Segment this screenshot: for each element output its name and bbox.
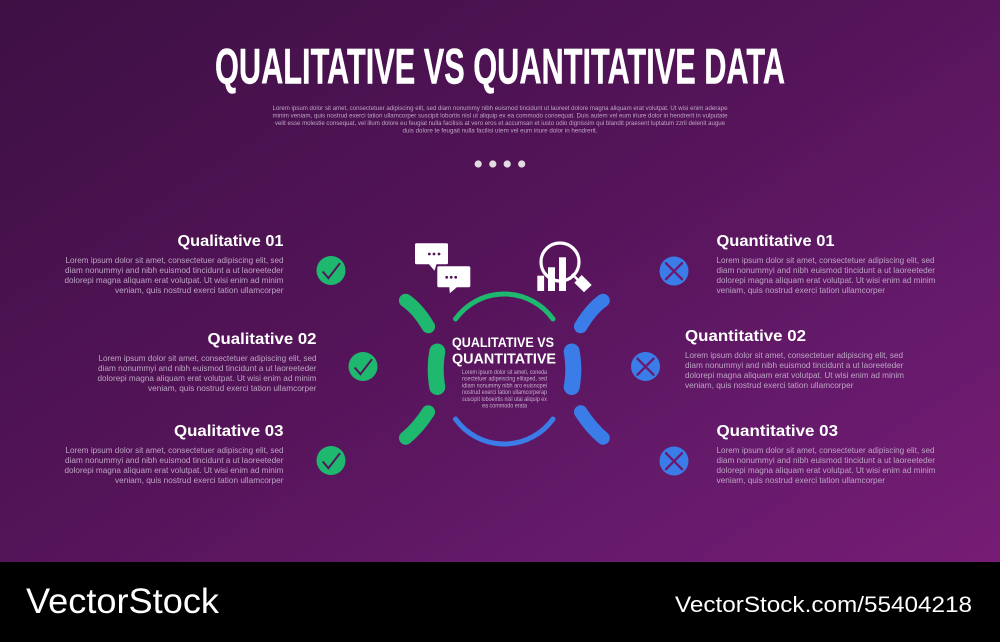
body text: diam nonummyi and nibh euismod tincidunt a ut laoreeteder (98, 363, 317, 373)
heading: Quantitative 02 (685, 328, 806, 345)
body text: diam nonummyi and nibh euismod tincidunt a ut laoreeteder (65, 265, 284, 275)
center text: Lorem ipsum dolor sit ameti, coneda (462, 370, 548, 376)
body text: veniam, quis nostrud exerci tation ullamcorper (115, 285, 284, 295)
heading: Qualitative 03 (174, 423, 284, 440)
body text: Lorem ipsum dolor sit amet, consectetuer adipiscing elit, sed (98, 353, 317, 363)
panel: Qualitative 03 (64, 423, 284, 485)
heading: Qualitative 02 (208, 331, 317, 348)
pagination dots (475, 160, 525, 168)
heading: Quantitative 03 (716, 423, 838, 440)
footer logo: VectorStock (26, 582, 220, 621)
icon: magnifier bar chart (537, 243, 592, 292)
center text (462, 370, 548, 410)
body text: dolorepi magna aliquam erat volutpat. Ut wisi enim ad minim (685, 370, 904, 380)
center heading (452, 335, 556, 368)
intro text (272, 105, 728, 134)
body text: dolorepi magna aliquam erat volutpat. Ut wisi enim ad minim (64, 275, 284, 285)
body text: diam nonummyi and nibh euismod tincidunt a ut laoreeteder (65, 455, 284, 465)
body text: dolorepi magna aliquam erat volutpat. Ut wisi enim ad minim (98, 373, 316, 383)
icon: check 01 (316, 256, 346, 285)
body text: dolorepi magna aliquam erat volutpat. Ut wisi enim ad minim (716, 465, 936, 475)
intro text: velit esse molestie consequat, vel illum dolore eu feugiat nulla facilisis at vero eros et accumsan et iusto odio dignissim qui blandit praesent luptatum zzril delenit augue (275, 120, 726, 127)
body text: diam nonummyi and nibh euismod tincidunt a ut laoreeteder (716, 455, 935, 465)
icon: chat bubbles (415, 243, 470, 293)
body text (98, 353, 317, 393)
body text: veniam, quis nostrud exerci tation ullamcorper (115, 475, 284, 485)
body text: Lorem ipsum dolor sit amet, consectetuer adipiscing elit, sed (66, 445, 284, 455)
center heading: QUALITATIVE VS (452, 335, 554, 350)
body text: veniam, quis nostrud exerci tation ullamcorper (685, 380, 854, 390)
icon: cross 03 (660, 446, 688, 476)
panel: Qualitative 01 (64, 233, 284, 295)
center text: nsectetuer adipeiscing elitaped, sed (462, 377, 547, 383)
body text (716, 255, 936, 295)
center text: idiam nonummy nibh aro euisnopei (462, 383, 547, 389)
center text: suscipit loboeirtis nisl utai aliquip ex (462, 397, 547, 403)
body text (64, 255, 284, 295)
body text (716, 445, 936, 485)
intro text: Lorem ipsum dolor sit amet, consectetuer adipiscing elit, sed diam nonummy nibh euismod tincidunt ut laoreet dolore magna aliquam erat volutpat. Ut wisi enim aderape (272, 105, 728, 112)
center text: nostrud exerci tation ullamcorperap (462, 390, 548, 396)
footer bar (0, 562, 1000, 642)
body text: dolorepi magna aliquam erat volutpat. Ut wisi enim ad minim (64, 465, 284, 475)
body text (64, 445, 284, 485)
icon: check 02 (348, 352, 378, 381)
body text: Lorem ipsum dolor sit amet, consectetuer adipiscing elit, sed (716, 255, 935, 265)
central diagram (406, 294, 603, 444)
body text: dolorepi magna aliquam erat volutpat. Ut wisi enim ad minim (716, 275, 936, 285)
heading: Qualitative 01 (178, 233, 284, 250)
body text: diam nonummyi and nibh euismod tincidunt a ut laoreeteder (716, 265, 935, 275)
body text: veniam, quis nostrud exerci tation ullamcorper (716, 285, 885, 295)
center heading: QUANTITATIVE (452, 352, 556, 368)
body text: Lorem ipsum dolor sit amet, consectetuer adipiscing elit, sed (685, 350, 903, 360)
body text: Lorem ipsum dolor sit amet, consectetuer adipiscing elit, sed (716, 445, 935, 455)
body text: Lorem ipsum dolor sit amet, consectetuer adipiscing elit, sed (66, 255, 284, 265)
panel: Quantitative 01 (716, 233, 936, 295)
green arcs (406, 294, 553, 438)
body text: diam nonummyi and nibh euismod tincidunt a ut laoreeteder (685, 360, 904, 370)
panel: Quantitative 03 (716, 423, 936, 485)
icon: cross 02 (631, 352, 660, 381)
body text: veniam, quis nostrud exerci tation ullamcorper (148, 383, 317, 393)
body text (685, 350, 904, 390)
intro text: duis dolore te feugait nulla facilisi utem vel eum iriure dolor in hendrerit. (402, 128, 598, 134)
heading: Quantitative 01 (716, 233, 835, 250)
panel: Quantitative 02 (685, 328, 904, 390)
body text: veniam, quis nostrud exerci tation ullamcorper (716, 475, 885, 485)
icon: check 03 (316, 446, 346, 475)
intro text: minim veniam, quis nostrud exerci tation ullamcorper suscipit lobortis nisl ut aliquip ex ea commodo consequat. Duis autem vel eum iriure dolor in hendrerit in vulputate (272, 112, 728, 120)
center text: ea commodo erata (482, 404, 528, 410)
footer url: VectorStock.com/55404218 (675, 592, 972, 617)
icon: cross 01 (660, 256, 688, 286)
blue arcs (456, 300, 603, 444)
panel: Qualitative 02 (98, 331, 317, 393)
